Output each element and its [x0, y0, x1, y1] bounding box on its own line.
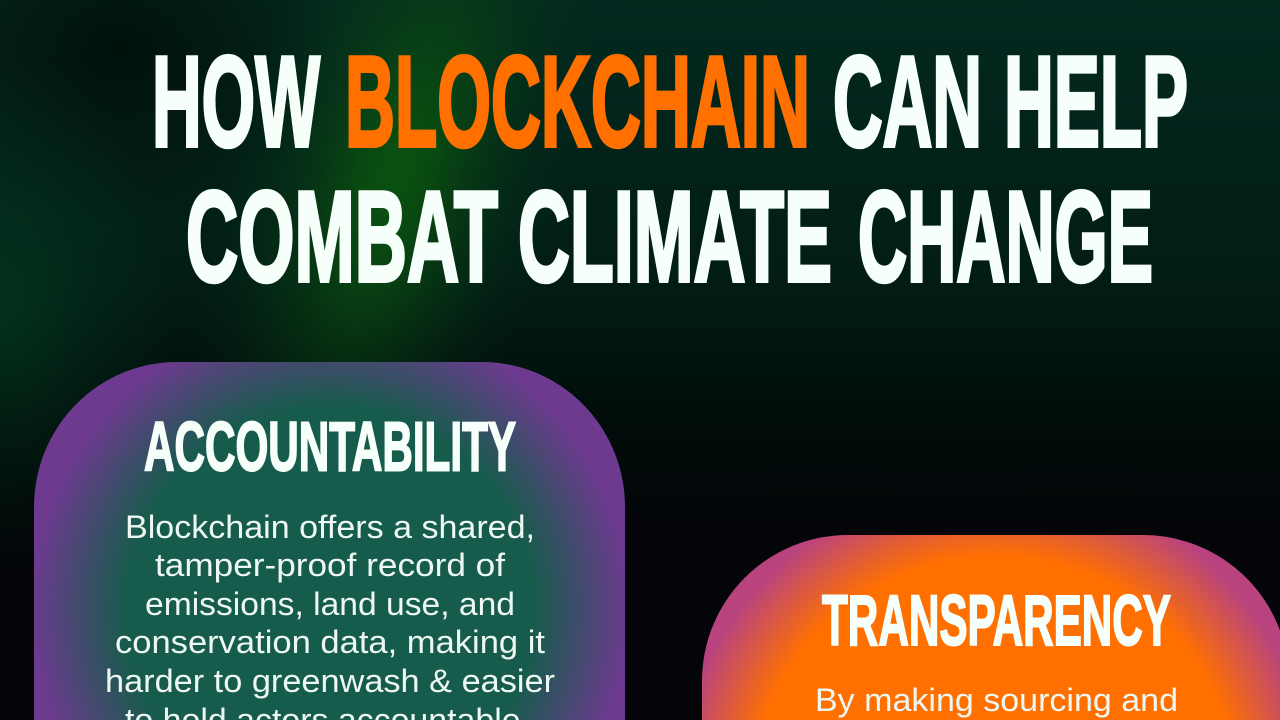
text block: accountability description: tamper-proof record of — [155, 547, 505, 583]
title: HOW — [152, 30, 320, 174]
title — [152, 30, 1188, 309]
text block: accountability description: emissions, land use, and — [145, 586, 515, 622]
text block: transparency description: By making sourcing and — [815, 682, 1178, 718]
panel: accountability — [34, 362, 625, 720]
title: CAN — [833, 30, 982, 174]
title: COMBAT — [186, 165, 498, 309]
title: CLIMATE — [518, 165, 832, 309]
panel: transparency — [702, 535, 1280, 720]
text block: accountability description: conservation data, making it — [115, 624, 545, 660]
title: BLOCKCHAIN — [345, 30, 810, 174]
text block: accountability description: Blockchain offers a shared, — [125, 509, 535, 545]
heading: accountability: ACCOUNTABILITY — [144, 408, 516, 486]
text block: accountability description: harder to greenwash & easier — [105, 663, 555, 699]
text block: accountability description — [105, 509, 555, 720]
